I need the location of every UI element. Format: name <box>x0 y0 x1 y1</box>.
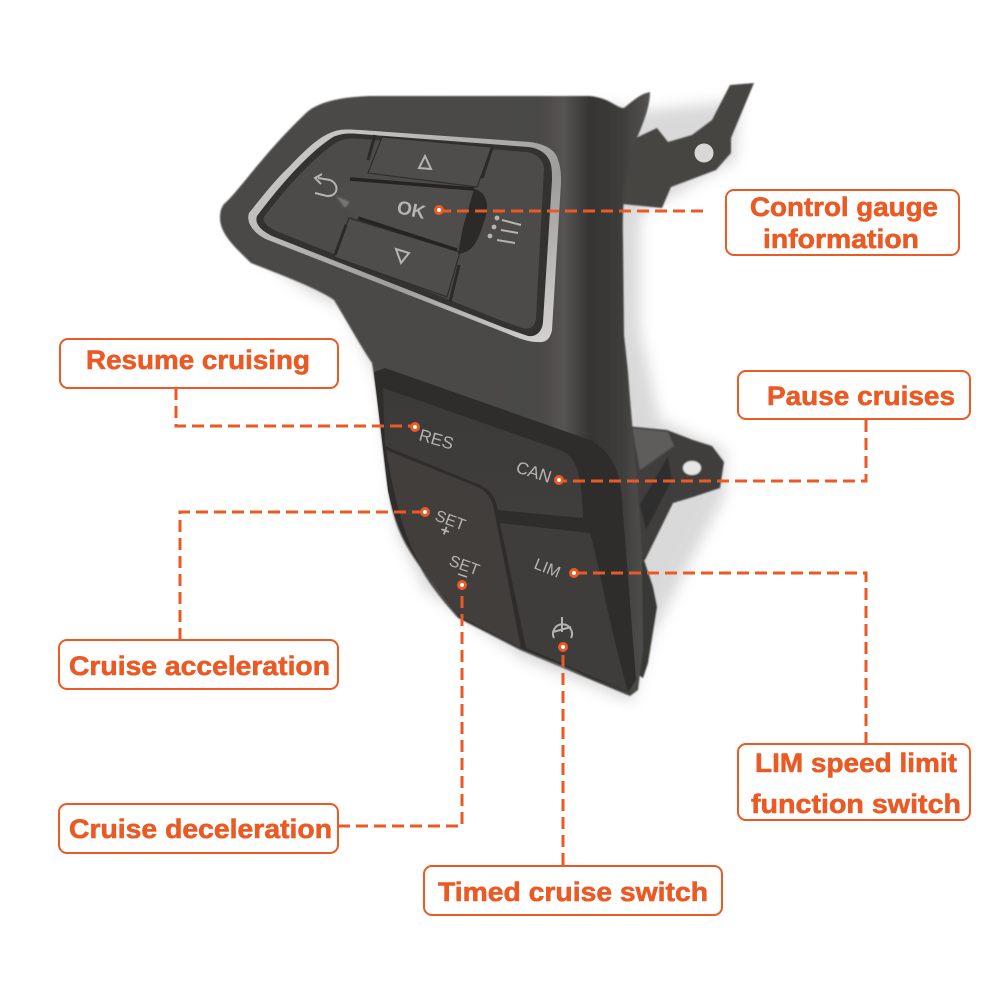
button panel <box>264 138 544 329</box>
main body <box>220 92 650 696</box>
marker dots <box>412 206 578 650</box>
set button <box>386 450 521 648</box>
key label: RES: RES <box>417 426 456 453</box>
key label: LIM: LIM <box>532 556 563 582</box>
lim button <box>500 523 628 692</box>
down triangle icon <box>396 249 409 263</box>
callout: control gauge information <box>726 190 959 255</box>
soft shadow <box>228 100 740 702</box>
upper mounting bracket <box>622 83 754 208</box>
product photo: steering wheel switch <box>220 83 754 702</box>
up triangle icon <box>419 156 431 169</box>
connector: timed cruise <box>562 647 564 865</box>
callout: cruise acceleration: Cruise acceleration <box>69 651 330 681</box>
connector: RES to resume <box>176 388 415 426</box>
key label: CAN: CAN <box>514 458 554 487</box>
minus sign <box>458 574 467 577</box>
back arrow icon <box>315 174 336 196</box>
connector: SET plus to acceleration <box>180 512 425 640</box>
chrome bezel <box>248 129 561 342</box>
callout: LIM speed limit function switch: LIM speed limit <box>755 748 957 778</box>
dark ring <box>256 133 552 336</box>
plus sign: + <box>438 522 452 541</box>
callout: cruise acceleration <box>59 640 338 689</box>
ok button <box>338 178 474 248</box>
upper bracket hole <box>694 144 714 162</box>
callout: control gauge information: Control gauge <box>750 192 938 222</box>
up button <box>368 137 492 187</box>
res can button <box>383 388 583 518</box>
down button <box>334 218 460 297</box>
lower mounting bracket <box>626 426 724 560</box>
up button grooves <box>368 135 492 178</box>
callout: resume cruising: Resume cruising <box>86 345 310 375</box>
callout: resume cruising <box>60 339 338 388</box>
key label: SET plus: SET <box>433 508 468 534</box>
down button grooves <box>335 225 459 302</box>
callout: pause cruises: Pause cruises <box>767 381 955 411</box>
connector: OK to control gauge <box>439 210 706 212</box>
key label: SET minus: SET <box>447 553 482 579</box>
connector: CAN to pause <box>559 420 866 481</box>
callout: cruise deceleration: Cruise deceleration <box>69 814 332 844</box>
connector: SET minus to deceleration <box>338 585 462 826</box>
back button highlight <box>336 196 350 208</box>
callout: cruise deceleration <box>59 804 338 853</box>
menu icon <box>488 216 521 243</box>
ok button outline <box>350 179 474 250</box>
key label: OK: OK <box>395 197 427 224</box>
side clips <box>630 555 657 678</box>
callout: control gauge information: information <box>763 224 919 254</box>
callout: pause cruises <box>738 371 970 419</box>
ok right recess <box>458 188 487 254</box>
callout: LIM speed limit function switch <box>738 744 970 820</box>
callout: timed cruise switch <box>424 866 722 915</box>
connector: LIM to speed limit <box>574 573 866 744</box>
cruise control body band <box>374 368 636 692</box>
timed cruise icon <box>553 617 572 638</box>
callout: LIM speed limit function switch: function switch <box>751 789 961 819</box>
callout: timed cruise switch: Timed cruise switch <box>438 877 708 907</box>
